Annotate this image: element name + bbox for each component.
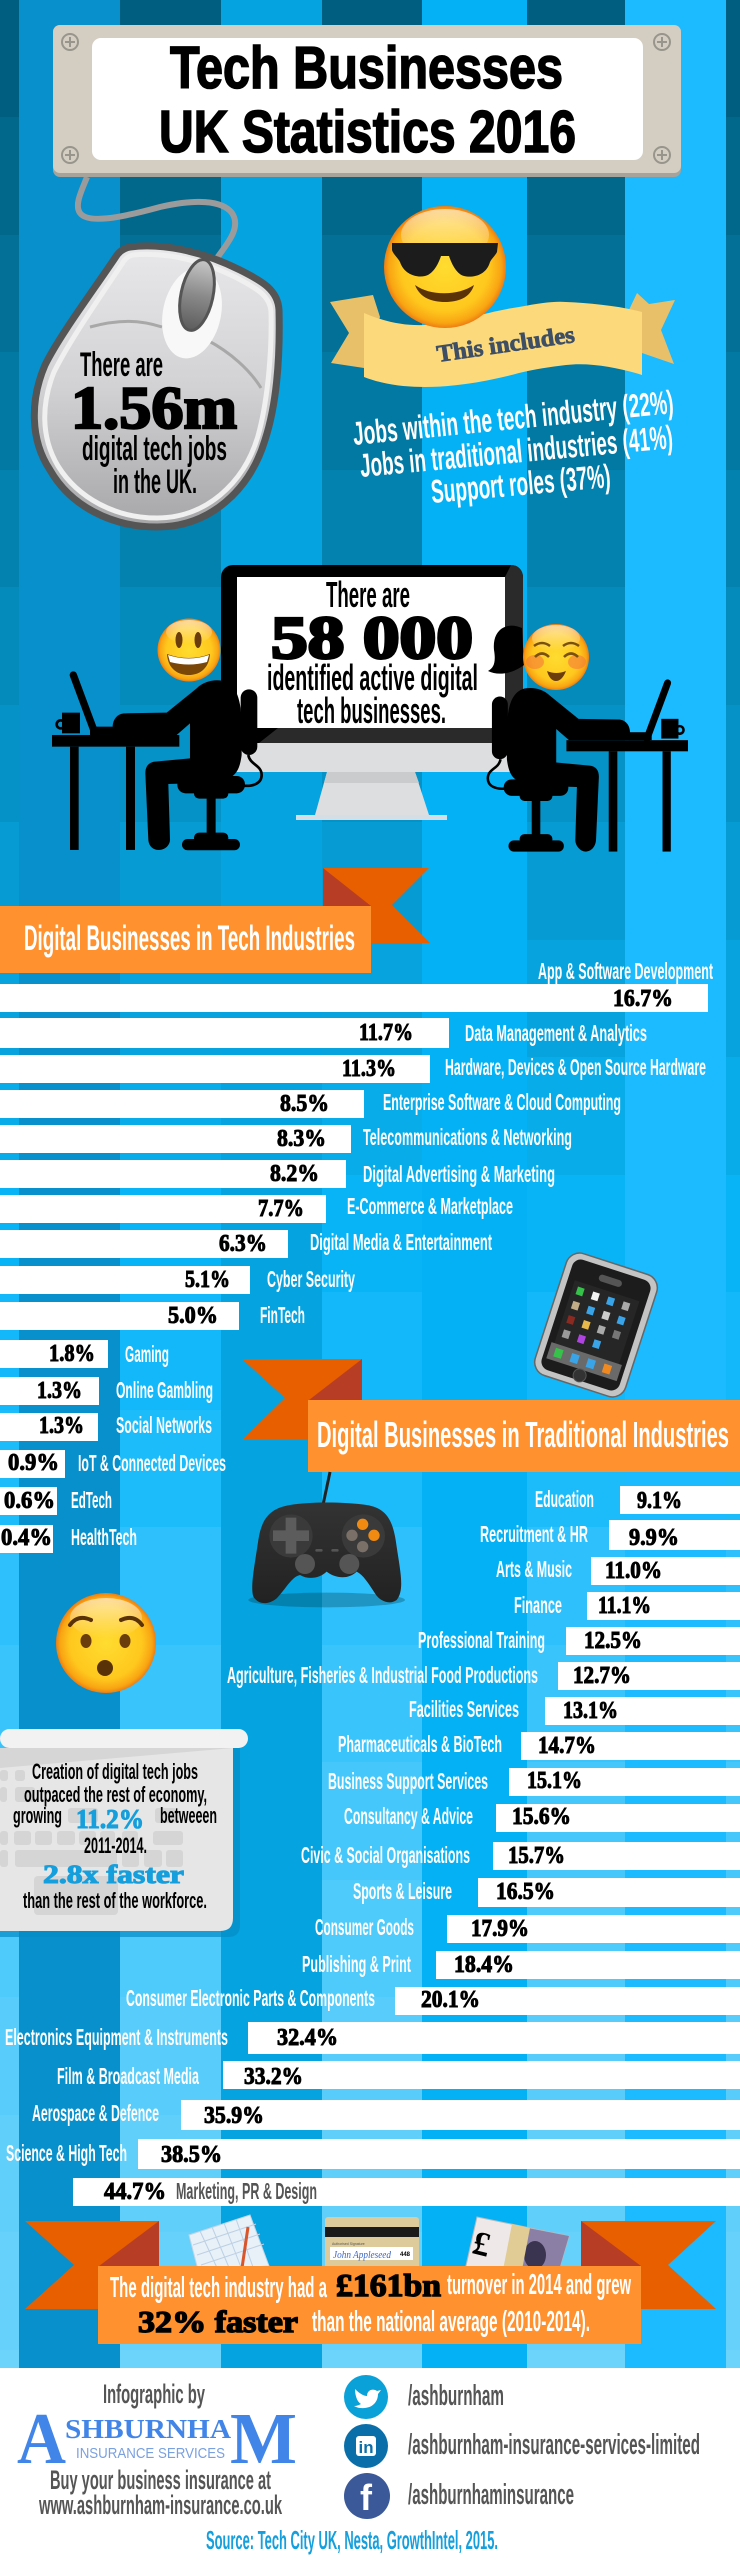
- row: digital media: [0, 1229, 492, 1258]
- title: [159, 35, 576, 165]
- monitor text: [267, 574, 478, 731]
- mouse text: digital tech jobs: [82, 430, 227, 468]
- row: electronics equipment: 32.4%: [277, 2025, 338, 2051]
- row: cyber security: 5.1%: [185, 1267, 230, 1293]
- row: marketing: [73, 2178, 740, 2206]
- icon: grinning emoji: [158, 618, 220, 682]
- row: consumer goods: [315, 1914, 740, 1943]
- row: civic: [301, 1842, 740, 1870]
- ribbon: this includes: [330, 293, 675, 387]
- logo: ashburnham insurance services: SHBURNHA: [65, 2414, 232, 2444]
- row: aerospace: Aerospace & Defence: [32, 2100, 159, 2126]
- row: e-commerce: E-Commerce & Marketplace: [347, 1193, 513, 1219]
- row: recruitment: 9.9%: [629, 1525, 679, 1551]
- row: civic: Civic & Social Organisations: [301, 1842, 470, 1868]
- icon: linkedin: in: [358, 2438, 374, 2457]
- icon: surprised emoji: [56, 1593, 156, 1693]
- logo: ashburnham insurance services: A: [17, 2398, 66, 2479]
- row: enterprise software: 8.5%: [280, 1091, 329, 1117]
- row: edtech: EdTech: [71, 1487, 112, 1513]
- row: professional training: [418, 1627, 740, 1655]
- row: professional training: Professional Training: [418, 1627, 545, 1653]
- row: finance: [514, 1592, 740, 1620]
- row: consumer electronics: Consumer Electronic Parts & Components: [126, 1985, 375, 2011]
- row: arts and music: 11.0%: [605, 1558, 662, 1584]
- logo: ashburnham insurance services: INSURANCE SERVICES: [76, 2445, 225, 2462]
- row: app and software development: 16.7%: [613, 986, 673, 1012]
- icon: blushing smile emoji: [523, 624, 589, 690]
- icon: sunglasses emoji: [384, 206, 506, 328]
- row: fintech: FinTech: [260, 1302, 305, 1328]
- heading: digital businesses in tech industries: [0, 868, 430, 973]
- row: education: 9.1%: [637, 1488, 682, 1514]
- row: business support: 15.1%: [527, 1768, 582, 1794]
- banner text: [110, 2267, 631, 2339]
- row: hardware: 11.3%: [342, 1056, 396, 1082]
- bottom banner with turnover stat: [25, 2221, 716, 2344]
- row: edtech: [0, 1487, 112, 1515]
- row: data management: [0, 1018, 647, 1048]
- row: digital advertising: [0, 1160, 555, 1188]
- footer: [0, 2368, 740, 2566]
- icon: credit card: Authorised Signature: [332, 2242, 365, 2246]
- row: iot: IoT & Connected Devices: [78, 1450, 226, 1476]
- row: science: [6, 2139, 740, 2169]
- icon: ponytail hair: [488, 626, 524, 674]
- row: film: [57, 2061, 740, 2090]
- row: recruitment: [480, 1520, 740, 1551]
- row: gaming: Gaming: [125, 1341, 169, 1367]
- row: digital advertising: Digital Advertising & Marketing: [363, 1161, 555, 1187]
- row: sports: Sports & Leisure: [353, 1878, 452, 1904]
- row: consumer electronics: 20.1%: [421, 1987, 480, 2013]
- mouse text: 1.56m: [71, 375, 237, 441]
- icon: credit card: 448: [400, 2252, 411, 2258]
- row: marketing: Marketing, PR & Design: [176, 2178, 317, 2204]
- bar chart: tech industries: [0, 958, 713, 1553]
- callout text: 2011-2014.: [84, 1833, 147, 1858]
- row: pharmaceuticals: 14.7%: [538, 1733, 596, 1759]
- row: consumer goods: 17.9%: [471, 1916, 529, 1942]
- banner text: £161bn: [336, 2267, 441, 2303]
- call to action: www.ashburnham-insurance.co.uk: [38, 2490, 283, 2520]
- icon: smartphone: [531, 1249, 661, 1401]
- icon: banknotes: [465, 2217, 569, 2270]
- call to action: [38, 2465, 283, 2520]
- icon: game controller: [248, 1472, 405, 1607]
- row: film: Film & Broadcast Media: [57, 2063, 199, 2089]
- logo: ashburnham insurance services: M: [230, 2398, 297, 2479]
- row: digital advertising: 8.2%: [270, 1161, 319, 1187]
- mouse text: [71, 346, 237, 501]
- row: marketing: 44.7%: [104, 2179, 166, 2205]
- job breakdown list: [351, 383, 675, 510]
- icon: credit card: [325, 2217, 419, 2272]
- row: consumer electronics: [126, 1985, 740, 2015]
- row: telecoms: 8.3%: [277, 1126, 326, 1152]
- row: electronics equipment: Electronics Equipment & Instruments: [5, 2024, 228, 2050]
- row: healthtech: [0, 1524, 137, 1553]
- row: civic: 15.7%: [508, 1843, 565, 1869]
- monitor text: identified active digital: [267, 657, 478, 698]
- row: fintech: 5.0%: [168, 1303, 218, 1329]
- row: facilities: [409, 1696, 740, 1725]
- row: science: 38.5%: [161, 2142, 222, 2168]
- row: education: [535, 1486, 740, 1514]
- row: digital media: 6.3%: [219, 1231, 267, 1257]
- callout text: growing: [13, 1803, 62, 1828]
- row: film: 33.2%: [244, 2064, 303, 2090]
- row: social networks: [0, 1412, 212, 1441]
- title: UK Statistics 2016: [159, 99, 576, 165]
- callout text: 2.8x faster: [43, 1860, 184, 1889]
- row: cyber security: Cyber Security: [267, 1266, 355, 1292]
- icon: graph paper and pencil: [189, 2215, 269, 2270]
- figure: right worker at desk: [488, 683, 688, 852]
- row: sports: 16.5%: [496, 1879, 555, 1905]
- row: finance: 11.1%: [598, 1593, 651, 1619]
- call to action: Buy your business insurance at: [50, 2465, 271, 2495]
- row: professional training: 12.5%: [584, 1628, 642, 1654]
- row: facilities: Facilities Services: [409, 1696, 519, 1722]
- row: facilities: 13.1%: [563, 1698, 618, 1724]
- panel: keyboard callout: [0, 1729, 248, 1937]
- icon: facebook: f: [360, 2477, 373, 2518]
- row: recruitment: Recruitment & HR: [480, 1521, 588, 1547]
- mouse cord: [78, 177, 235, 258]
- social handles: [408, 2380, 700, 2511]
- row: e-commerce: [0, 1193, 513, 1223]
- row: online gambling: [0, 1377, 213, 1405]
- row: healthtech: 0.4%: [1, 1525, 52, 1551]
- row: publishing: 18.4%: [454, 1952, 514, 1978]
- row: sports: [353, 1878, 740, 1907]
- heading: digital businesses in traditional industries: [242, 1359, 740, 1472]
- banner text: The digital tech industry had a: [110, 2272, 327, 2304]
- icon: credit card: John Appleseed: [333, 2249, 391, 2261]
- icon: facebook: [344, 2473, 390, 2519]
- row: telecoms: [0, 1124, 572, 1153]
- row: consultancy: 15.6%: [512, 1804, 571, 1830]
- title: Tech Businesses: [170, 35, 563, 101]
- monitor text: There are: [326, 574, 410, 615]
- callout text: Creation of digital tech jobs: [32, 1759, 198, 1784]
- figure: left worker at desk: [52, 675, 262, 850]
- row: edtech: 0.6%: [4, 1488, 55, 1514]
- row: iot: [0, 1450, 226, 1478]
- logo: ashburnham insurance services: [17, 2398, 297, 2479]
- monitor text: tech businesses.: [297, 690, 446, 731]
- icon: twitter: [344, 2375, 388, 2419]
- row: consultancy: [344, 1803, 740, 1832]
- row: publishing: [302, 1951, 740, 1979]
- row: arts and music: [496, 1556, 740, 1585]
- callout text: betweeen: [160, 1803, 217, 1828]
- row: app and software development: [0, 958, 713, 1012]
- row: electronics equipment: [5, 2022, 740, 2054]
- row: digital media: Digital Media & Entertainment: [310, 1229, 492, 1255]
- row: cyber security: [0, 1266, 355, 1294]
- row: iot: 0.9%: [8, 1450, 59, 1476]
- row: online gambling: 1.3%: [37, 1378, 82, 1404]
- row: consumer goods: Consumer Goods: [315, 1914, 414, 1940]
- banner text: 32% faster: [138, 2304, 298, 2339]
- social handles: /ashburnham: [408, 2380, 504, 2412]
- row: pharmaceuticals: [338, 1731, 740, 1760]
- row: social networks: Social Networks: [116, 1412, 212, 1438]
- callout text: outpaced the rest of economy,: [24, 1782, 207, 1807]
- callout text: 11.2%: [76, 1804, 144, 1834]
- social handles: /ashburnhaminsurance: [408, 2479, 574, 2511]
- row: consultancy: Consultancy & Advice: [344, 1803, 473, 1829]
- row: arts and music: Arts & Music: [496, 1556, 572, 1582]
- row: gaming: [0, 1340, 169, 1368]
- row: telecoms: Telecommunications & Networking: [363, 1124, 572, 1150]
- row: data management: 11.7%: [359, 1020, 413, 1046]
- row: publishing: Publishing & Print: [302, 1951, 411, 1977]
- callout text: than the rest of the workforce.: [23, 1888, 207, 1913]
- icon: banknotes: £: [469, 2225, 494, 2265]
- row: finance: Finance: [514, 1592, 562, 1618]
- monitor text: 58 000: [271, 605, 473, 671]
- row: fintech: [0, 1302, 305, 1330]
- bar chart: traditional industries: [5, 1486, 740, 2206]
- row: enterprise software: [0, 1089, 621, 1118]
- row: aerospace: [32, 2100, 740, 2130]
- icon: desktop monitor with business stat: [221, 565, 523, 820]
- heading: digital businesses in tech industries: Digital Businesses in Tech Industries: [24, 919, 355, 958]
- row: business support: [328, 1768, 740, 1796]
- row: gaming: 1.8%: [49, 1341, 95, 1367]
- row: social networks: 1.3%: [39, 1413, 84, 1439]
- row: agriculture: 12.7%: [573, 1663, 631, 1689]
- mouse text: There are: [80, 346, 163, 384]
- row: aerospace: 35.9%: [204, 2103, 264, 2129]
- row: pharmaceuticals: Pharmaceuticals & BioTech: [338, 1731, 502, 1757]
- row: healthtech: HealthTech: [71, 1524, 137, 1550]
- row: education: Education: [535, 1486, 594, 1512]
- title plate: [53, 25, 681, 177]
- row: online gambling: Online Gambling: [116, 1377, 213, 1403]
- row: business support: Business Support Services: [328, 1768, 488, 1794]
- infographic by: Infographic by: [103, 2379, 205, 2409]
- mouse text: in the UK.: [113, 463, 197, 501]
- callout text: [13, 1759, 217, 1913]
- icon: computer mouse with jobs stat: [34, 246, 279, 527]
- row: science: Science & High Tech: [6, 2140, 127, 2166]
- job breakdown list: Support roles (37%): [429, 457, 612, 510]
- row: e-commerce: 7.7%: [258, 1196, 304, 1222]
- icon: linkedin: [344, 2424, 388, 2468]
- ribbon text: This includes: [435, 322, 576, 368]
- row: hardware: [0, 1054, 706, 1083]
